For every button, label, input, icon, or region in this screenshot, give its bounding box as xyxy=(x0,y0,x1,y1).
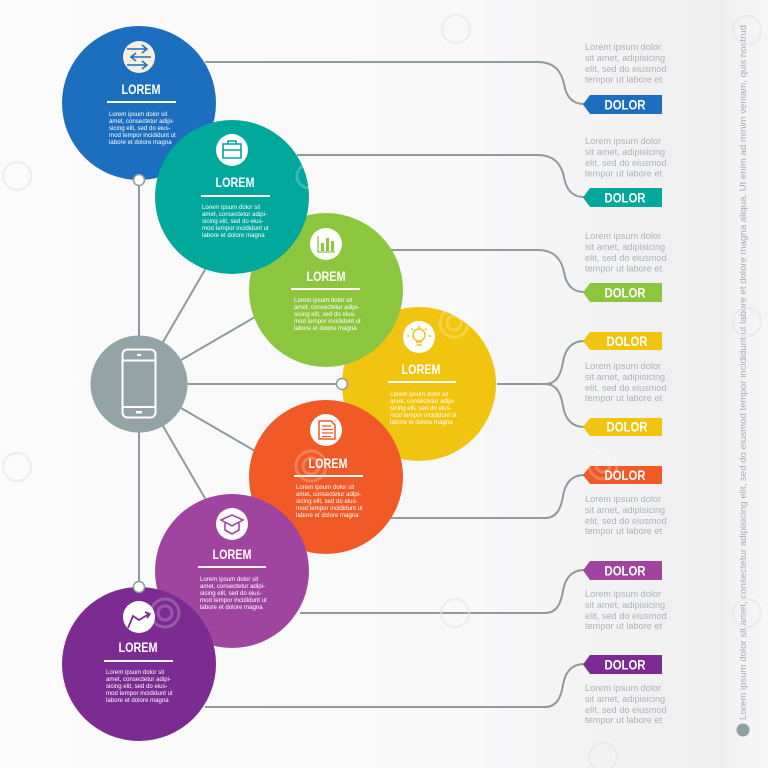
tag xyxy=(583,283,662,302)
panel: yellow circle xyxy=(342,307,496,461)
icon: trend arrow xyxy=(123,601,155,633)
heading: LOREM xyxy=(216,175,254,190)
node: middle xyxy=(336,378,348,390)
body text: labore et dolore magna xyxy=(294,325,357,332)
hub: phone xyxy=(90,336,188,432)
body text: labore et dolore magna xyxy=(109,139,172,146)
body text: labore et dolore magna xyxy=(106,697,169,704)
label block: yellow: elit, sed do eiusmod xyxy=(585,383,667,393)
rule xyxy=(291,288,360,290)
body text: Lorem ipsum dolor sit xyxy=(109,111,168,118)
label block: green: sit amet, adipisicing xyxy=(585,242,665,252)
node: top xyxy=(134,174,144,186)
rule xyxy=(104,660,173,662)
tag xyxy=(583,188,662,207)
body text: labore et dolore magna xyxy=(296,512,359,519)
label block: orange: DOLOR xyxy=(604,468,646,483)
rule xyxy=(107,101,176,103)
label block: orange: Lorem ipsum dolor xyxy=(585,494,661,504)
body text: mod tempor incididunt ut xyxy=(390,412,457,419)
rule xyxy=(198,566,266,568)
label block: teal xyxy=(583,136,667,207)
label block: blue xyxy=(583,42,667,114)
icon: phone xyxy=(122,350,156,418)
label block: dark purple xyxy=(583,655,667,725)
panel: green circle xyxy=(249,213,403,367)
label block: yellow xyxy=(583,332,667,436)
label block: teal: Lorem ipsum dolor xyxy=(585,136,661,146)
body text: labore et dolore magna xyxy=(390,419,453,426)
label block: dark purple: sit amet, adipisicing xyxy=(585,694,665,704)
label block: green: tempor ut labore et xyxy=(585,264,663,274)
label block: dark purple: tempor ut labore et xyxy=(585,715,663,725)
label block: light purple: DOLOR xyxy=(604,564,646,578)
body text: Lorem ipsum dolor sit xyxy=(390,391,449,398)
body text: amet, consectetur adipi- xyxy=(294,304,359,311)
panel: teal circle xyxy=(155,120,309,274)
label block: green: Lorem ipsum dolor xyxy=(585,231,661,241)
tag top xyxy=(583,332,662,350)
label block: orange xyxy=(583,466,667,536)
panel: light purple circle xyxy=(155,494,309,648)
heading: LOREM xyxy=(118,640,158,655)
body text: sicing elit, sed do eius- xyxy=(294,311,356,318)
connector lines xyxy=(139,62,584,707)
node: bottom xyxy=(134,582,144,592)
heading: LOREM xyxy=(212,547,252,562)
label block: dark purple: Lorem ipsum dolor xyxy=(585,683,661,693)
heading: LOREM xyxy=(402,362,440,377)
label block: blue: Lorem ipsum dolor xyxy=(585,42,661,52)
body text: labore et dolore magna xyxy=(202,232,265,239)
label block: teal: tempor ut labore et xyxy=(585,168,663,178)
body text: Lorem ipsum dolor sit xyxy=(106,669,165,676)
body text: sicing elit, sed do eius- xyxy=(109,125,171,132)
body text: sicing elit, sed do eius- xyxy=(106,683,168,690)
sidebar xyxy=(721,0,768,768)
icon: bar chart xyxy=(310,228,342,260)
label block: yellow: DOLOR xyxy=(606,334,648,349)
icon: arrows xyxy=(123,41,155,73)
rule xyxy=(294,475,363,477)
rule xyxy=(388,381,456,383)
label block: light purple: tempor ut labore et xyxy=(585,621,663,631)
label block: blue: sit amet, adipisicing xyxy=(585,53,665,63)
label block: dark purple: DOLOR xyxy=(604,658,646,672)
heading: LOREM xyxy=(122,82,160,97)
icon: briefcase xyxy=(216,134,248,166)
body text: mod tempor incididunt ut xyxy=(296,505,363,512)
body text: amet, consectetur adipi- xyxy=(109,118,174,125)
label block: green: elit, sed do eiusmod xyxy=(585,253,667,263)
body text: amet, consectetur adipi- xyxy=(202,211,267,218)
body text: labore et dolore magna xyxy=(200,604,263,611)
body text: amet, consectetur adipi- xyxy=(296,491,361,498)
label block: teal: elit, sed do eiusmod xyxy=(585,158,667,168)
label block: yellow: sit amet, adipisicing xyxy=(585,372,665,382)
tag xyxy=(583,95,662,114)
body text: Lorem ipsum dolor sit xyxy=(296,484,355,491)
label block: yellow: DOLOR xyxy=(606,420,648,434)
label block: teal: sit amet, adipisicing xyxy=(585,147,665,157)
label block: light purple: elit, sed do eiusmod xyxy=(585,611,667,621)
label block: green: DOLOR xyxy=(604,286,646,300)
body text: mod tempor incididunt ut xyxy=(200,597,267,604)
heading: LOREM xyxy=(308,456,348,471)
body text: mod tempor incididunt ut xyxy=(202,225,269,232)
body text: sicing elit, sed do eius- xyxy=(202,218,264,225)
body text: amet, consectetur adipi- xyxy=(390,398,455,405)
label block: green xyxy=(583,231,667,302)
icon: light bulb xyxy=(403,321,435,353)
label block: orange: tempor ut labore et xyxy=(585,526,663,536)
label block: dark purple: elit, sed do eiusmod xyxy=(585,705,667,715)
label block: yellow: tempor ut labore et xyxy=(585,393,663,403)
label block: blue: elit, sed do eiusmod xyxy=(585,64,667,74)
body text: sicing elit, sed do eius- xyxy=(296,498,358,505)
panel: blue circle xyxy=(62,26,216,180)
label block: orange: sit amet, adipisicing xyxy=(585,505,665,515)
body text: sicing elit, sed do eius- xyxy=(390,405,452,412)
body text: sicing elit, sed do eius- xyxy=(200,590,262,597)
panel: orange circle xyxy=(249,400,403,554)
body text: mod tempor incididunt ut xyxy=(106,690,173,697)
label block: light purple: sit amet, adipisicing xyxy=(585,600,665,610)
icon: document xyxy=(310,414,342,446)
label block: blue: tempor ut labore et xyxy=(585,74,663,84)
sidebar dot xyxy=(736,724,750,736)
label block: light purple xyxy=(583,561,667,631)
body text: Lorem ipsum dolor sit xyxy=(200,576,259,583)
label block: teal: DOLOR xyxy=(604,190,646,206)
label block: light purple: Lorem ipsum dolor xyxy=(585,589,661,599)
panel: dark purple circle xyxy=(62,587,216,741)
tag bottom xyxy=(583,418,662,436)
body text: Lorem ipsum dolor sit xyxy=(294,297,353,304)
sidebar vertical text: Lorem ipsum dolor sit amet, consectetur adipisicing elit, sed do eiusmod tempor incididunt ut labore et dolore magna aliqua. Ut enim ad minim veniam, quis nostrud xyxy=(738,25,748,720)
body text: mod tempor incididunt ut xyxy=(294,318,361,325)
label block: blue: DOLOR xyxy=(604,98,646,112)
label block: yellow: Lorem ipsum dolor xyxy=(585,361,661,371)
rule xyxy=(201,195,270,197)
body text: Lorem ipsum dolor sit xyxy=(202,204,261,211)
heading: LOREM xyxy=(306,269,346,284)
label block: orange: elit, sed do eiusmod xyxy=(585,516,667,526)
watermarks xyxy=(151,164,617,627)
body text: mod tempor incididunt ut xyxy=(109,132,176,139)
body text: amet, consectetur adipi- xyxy=(106,676,171,683)
icon: graduation cap xyxy=(216,508,248,540)
body text: amet, consectetur adipi- xyxy=(200,583,265,590)
